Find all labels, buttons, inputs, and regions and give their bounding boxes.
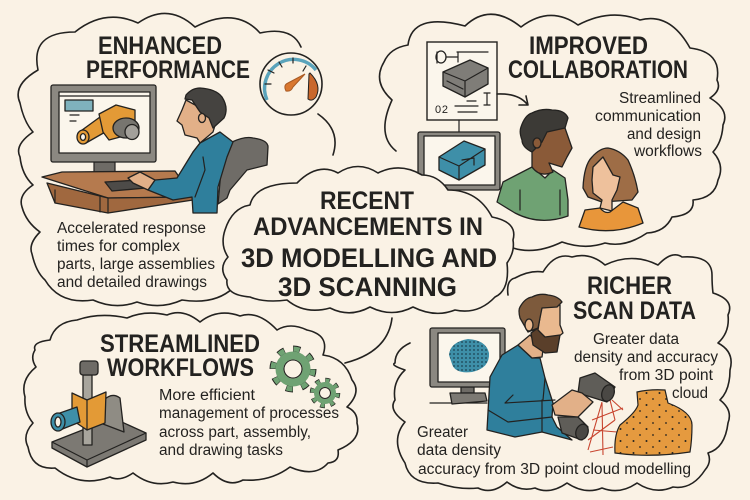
heading: richer scan data: RICHER xyxy=(587,272,672,300)
illustration: collaborator in green xyxy=(497,109,572,220)
panel: streamlined workflows xyxy=(24,313,392,484)
text: streamlined workflows description: across part, assembly, xyxy=(159,424,311,441)
text: richer scan data upper description: density and accuracy xyxy=(574,349,718,366)
text: richer scan data lower description: data density xyxy=(417,442,501,459)
icon: gears xyxy=(273,349,338,406)
illustration: milling machine xyxy=(51,361,146,467)
arrow: sheet to team xyxy=(497,94,528,105)
illustration: technical drawing sheet xyxy=(427,42,497,120)
text: streamlined workflows description: More efficient xyxy=(159,387,256,404)
title text: ADVANCEMENTS IN xyxy=(253,213,483,241)
text: enhanced performance description xyxy=(57,220,215,291)
text: richer scan data upper description xyxy=(574,331,718,402)
text: improved collaboration description: Streamlined xyxy=(619,90,701,107)
icon: speed gauge xyxy=(260,53,322,115)
illustration: wooden desk xyxy=(42,171,193,213)
illustration: laser scan lines xyxy=(588,400,623,455)
illustration: monitor with blue box xyxy=(418,120,500,190)
heading: enhanced performance xyxy=(86,32,250,84)
text: improved collaboration description xyxy=(595,90,702,160)
text: enhanced performance description: times for complex xyxy=(57,238,180,255)
heading: richer scan data xyxy=(573,272,696,325)
text: improved collaboration description: and design xyxy=(627,126,701,143)
text: richer scan data upper description: from 3D point xyxy=(619,367,714,384)
illustration: man scanning xyxy=(487,294,617,442)
heading: enhanced performance: PERFORMANCE xyxy=(86,56,250,84)
heading: improved collaboration xyxy=(508,32,688,84)
text: richer scan data lower description xyxy=(417,424,691,478)
illustration: monitor with 3D part xyxy=(51,85,156,180)
text: streamlined workflows description xyxy=(159,387,339,459)
illustration: technical drawing sheet: 02 xyxy=(435,104,448,116)
cloud outline: improved collaboration xyxy=(380,14,725,250)
text: enhanced performance description: Accelerated response xyxy=(57,220,206,237)
panel: richer scan data xyxy=(393,255,731,491)
text: richer scan data upper description: cloud xyxy=(672,385,708,402)
cloud outline: streamlined workflows xyxy=(24,313,392,484)
illustration: scanned vase xyxy=(615,390,692,455)
heading: richer scan data: SCAN DATA xyxy=(573,297,696,325)
text: enhanced performance description: parts, large assemblies xyxy=(57,256,215,273)
panel: improved collaboration xyxy=(380,14,725,250)
heading: enhanced performance: ENHANCED xyxy=(98,32,222,60)
illustration: collaborator in orange xyxy=(579,148,643,231)
text: richer scan data lower description: accuracy from 3D point cloud modelling xyxy=(418,461,691,478)
heading: streamlined workflows: WORKFLOWS xyxy=(107,354,254,382)
panel: enhanced performance xyxy=(18,13,335,306)
title text: RECENT xyxy=(320,187,414,215)
panel: central title xyxy=(223,166,514,313)
text: richer scan data upper description: Greater data xyxy=(593,331,679,348)
title text: 3D SCANNING xyxy=(278,272,457,302)
text: improved collaboration description: communication xyxy=(595,108,701,125)
heading: improved collaboration: IMPROVED xyxy=(529,32,648,60)
text: enhanced performance description: and detailed drawings xyxy=(57,274,207,291)
cloud outline: enhanced performance xyxy=(18,13,335,306)
heading: improved collaboration: COLLABORATION xyxy=(508,56,688,84)
heading: streamlined workflows xyxy=(100,330,260,382)
illustration: monitor with point cloud xyxy=(430,328,505,404)
text: richer scan data lower description: Greater xyxy=(417,424,468,441)
cloud outline: central title xyxy=(223,166,514,313)
cloud outline: richer scan data xyxy=(393,255,731,491)
text: streamlined workflows description: and drawing tasks xyxy=(159,442,283,459)
text: improved collaboration description: workflows xyxy=(633,143,702,160)
title text: 3D MODELLING AND xyxy=(241,243,497,273)
text: streamlined workflows description: management of processes xyxy=(159,405,339,422)
heading: streamlined workflows: STREAMLINED xyxy=(100,330,260,358)
illustration: seated engineer xyxy=(128,88,268,213)
title text xyxy=(241,187,497,302)
